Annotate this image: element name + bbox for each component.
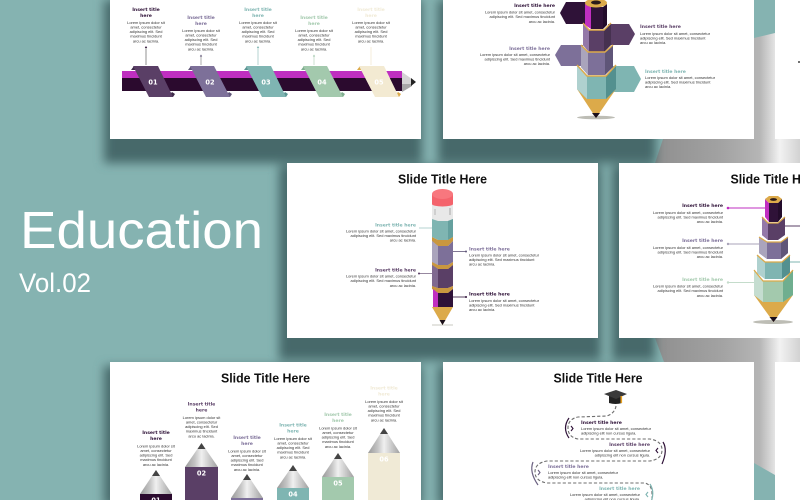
pencil 4: here [287,428,299,434]
text block green: Insert title here [682,277,723,283]
text block 3: adipiscing elit non cursus ligula. [548,474,603,480]
step 4 text: here [308,21,320,27]
text block dark: Insert title here [682,203,723,209]
text block purple: arcu ac lacinia. [390,283,416,288]
pencil 2: Lorem ipsum dolor sit [183,415,221,420]
text block 2: Lorem ipsum dolor sit amet, consectetur [640,31,711,36]
pencil 3 [228,435,267,500]
text block 1: Lorem ipsum dolor sit amet, consectetur [581,426,652,431]
pencil 6: adipiscing elit. Sed [368,408,400,413]
text block grey-purple [469,246,540,266]
step 3 text: Lorem ipsum dolor sit [239,20,278,25]
text block purple: adipiscing elit. Sed maximus tincidunt [351,278,417,283]
text block 1: arcu ac lacinia. [529,19,555,24]
step 1 text: amet, consectetur [130,24,162,30]
ribbon numbers: 01 [148,78,158,86]
pencil 2: arcu ac lacinia. [188,434,215,438]
text block 4: Insert title here [599,486,640,492]
step 2 text: Lorem ipsum dolor sit [182,28,221,33]
text block dark: Insert title here [469,292,510,298]
pencil 2 [183,402,221,500]
step 5 text: arcu ac lacinia. [358,38,384,44]
text block 2 [640,24,711,45]
text block 4: adipiscing elit. Sed maximus tincidunt [645,80,711,84]
pencil 6: 06 [379,456,389,464]
pencil 6: Lorem ipsum dolor sit [365,399,404,404]
step 3 text: adipiscing elit. Sed [242,29,274,34]
text block 1: adipiscing elit. Sed maximus tincidunt [490,14,556,19]
text block 3: Lorem ipsum dolor sit amet, consectetur [480,52,551,57]
pencil 3: here [241,441,253,447]
text block 4 [645,69,716,89]
arrow tabs [555,2,641,92]
pencil 5: 05 [333,480,343,488]
text block 3 [480,46,551,66]
text block dark: Lorem ipsum dolor sit amet, consectetur [653,210,724,215]
slide title: Slide Title Here [398,172,487,186]
pencil 5: here [332,418,344,424]
pencil 6: arcu ac lacinia. [371,418,397,422]
step 1 text: adipiscing elit. Sed [130,29,162,34]
text block 2: adipiscing elit non cursus ligula. [595,452,650,458]
text block 1: Lorem ipsum dolor sit amet, consectetur [485,10,556,14]
step 5 text: here [365,13,377,19]
text block 4: Insert title here [645,69,686,75]
pencil 3: adipiscing elit. Sed [231,458,263,462]
pencil 1: maximus tincidunt [140,457,173,462]
subtitle: Vol.02 [19,268,91,298]
ribbon numbers: 05 [374,78,384,86]
text block dark [653,203,724,224]
step 2 text: Insert title [187,15,215,21]
pencil 3: maximus tincidunt [231,462,264,467]
text block 4: Lorem ipsum dolor sit amet, consectetur [645,75,716,80]
step 5 text: maximus tincidunt [355,34,388,38]
pencil 1: Lorem ipsum dolor sit [137,444,176,448]
pencil 1: arcu ac lacinia. [143,462,169,467]
text block purple: Lorem ipsum dolor sit amet, consectetur [346,274,417,278]
text block grey-purple: Insert title here [682,238,723,244]
pencil 3: amet, consectetur [231,453,263,458]
step 1 text: arcu ac lacinia. [133,38,159,44]
step 5 text: amet, consectetur [355,24,387,30]
text block 2: arcu ac lacinia. [640,40,666,45]
step 4 text: maximus tincidunt [298,42,331,46]
pencil 5: amet, consectetur [322,430,354,435]
pencil 1: here [150,436,162,442]
text block 3: Lorem ipsum dolor sit amet, consectetur [548,470,619,475]
text block dark: arcu ac lacinia. [697,219,723,224]
pencil 5: Lorem ipsum dolor sit [319,426,358,430]
slide: tapered pencil [619,163,800,338]
step 5 text [352,7,391,44]
step 2 text [182,15,221,52]
text block 2: Insert title here [640,24,681,30]
step 4 text: amet, consectetur [298,32,330,38]
pencil 5: Insert title [324,412,352,418]
pencil 4: 04 [288,490,298,498]
step 1 text: maximus tincidunt [130,34,163,38]
step 4 text: Insert title [300,15,328,21]
pencil 5: maximus tincidunt [322,439,355,444]
slide shadows [104,0,656,500]
text block dark [469,292,540,312]
step 3 text: arcu ac lacinia. [245,38,271,44]
text block teal [346,222,417,242]
step 5 text: Insert title [357,7,385,13]
connectors [727,207,800,284]
text block 4: Lorem ipsum dolor sit amet, consectetur [570,492,641,497]
slide title: Slide Title Here [554,370,642,386]
pencil 1: adipiscing elit. Sed [140,452,172,458]
step 2 text: here [195,21,207,27]
step 1 text: here [140,13,152,19]
text block teal: arcu ac lacinia. [390,238,416,242]
text block 2 [580,442,651,458]
connectors [418,228,467,298]
pencil 6: maximus tincidunt [368,412,401,418]
text block 1 [485,3,556,24]
text block 1: Insert title here [514,3,555,9]
text block green: adipiscing elit. Sed maximus tincidunt [658,288,724,293]
text block grey-purple: adipiscing elit. Sed maximus tincidunt [469,257,535,262]
ribbon numbers: 04 [317,78,327,86]
pencil 2: here [196,408,207,414]
text block 4 [570,486,641,500]
step 4 text: adipiscing elit. Sed [298,37,330,42]
pencil [432,189,453,325]
text block purple: Insert title here [375,268,416,274]
pencil 3: arcu ac lacinia. [234,467,260,472]
icon: graduation cap [604,390,627,404]
step 1 text: Lorem ipsum dolor sit [127,20,166,25]
pencil 4: maximus tincidunt [277,450,310,454]
pencil 3: Insert title [233,435,261,441]
pencil 4: Insert title [279,422,307,428]
chevrons [538,426,658,497]
step 3 text [239,7,278,44]
text block grey-purple: adipiscing elit. Sed maximus tincidunt [658,250,724,254]
pencil body [122,71,416,92]
step 5 text: Lorem ipsum dolor sit [352,20,391,25]
text block dark: adipiscing elit. Sed maximus tincidunt [658,214,724,220]
step 2 text: arcu ac lacinia. [188,46,214,52]
text block 2: Insert title here [609,442,650,448]
step 3 text: here [252,13,264,19]
text block 1: Insert title here [581,420,622,426]
text block dark: adipiscing elit. Sed maximus tincidunt [469,302,535,308]
pencil 4: adipiscing elit. Sed [277,445,309,450]
slide edge: top right [775,0,800,139]
pencil 5 [319,412,358,500]
pencil 2: maximus tincidunt [186,428,218,434]
ribbon numbers [148,78,384,86]
step 1 text [127,7,166,44]
dashed path [532,406,665,500]
pencil 4: amet, consectetur [277,440,309,446]
text block dark: Lorem ipsum dolor sit amet, consectetur [469,298,540,303]
text block grey-purple [653,238,724,259]
text block 3: arcu ac lacinia. [524,61,550,66]
pencil 6: here [378,392,390,398]
ribbon numbers: 02 [205,78,215,86]
pencil 1: Insert title [142,430,170,436]
pencil 6: Insert title [370,386,398,392]
text block teal: adipiscing elit. Sed maximus tincidunt [351,233,417,238]
step 4 text [295,15,334,52]
pencil 2: 02 [197,470,206,478]
step 3 text: Insert title [244,7,272,13]
slide: timeline pencil [110,0,421,139]
text block grey-purple: arcu ac lacinia. [697,254,723,259]
main title: Education [20,202,263,260]
text block purple [346,268,417,288]
pencil 5: arcu ac lacinia. [325,444,351,449]
text block teal: Insert title here [375,222,416,228]
text block 1: adipiscing elit non cursus ligula. [581,430,636,436]
step 1 text: Insert title [132,7,160,13]
pencil 1: amet, consectetur [140,448,172,453]
pencil 4: Lorem ipsum dolor sit [274,436,313,441]
text block 3: Insert title here [509,46,550,52]
ribbons [131,66,401,97]
pencil 1 [137,430,176,500]
slide title: Slide Title Here [221,370,310,386]
step 3 text: amet, consectetur [242,24,274,30]
pencil 2: adipiscing elit. Sed [185,424,218,429]
step 3 text: maximus tincidunt [242,34,275,38]
pencil 2: amet, consectetur [186,420,218,424]
text block grey-purple: Lorem ipsum dolor sit amet, consectetur [653,245,724,250]
step 4 text: arcu ac lacinia. [301,46,327,52]
text block green: arcu ac lacinia. [697,293,723,298]
text block green: Lorem ipsum dolor sit amet, consectetur [653,284,724,288]
slide: eraser pencil [287,163,598,338]
text block 3 [548,464,619,480]
text block grey-purple: Insert title here [469,246,510,252]
step 2 text: maximus tincidunt [185,42,218,46]
text block 3: Insert title here [548,464,589,470]
pencil 5: adipiscing elit. Sed [322,434,354,440]
text block grey-purple: Lorem ipsum dolor sit amet, consectetur [469,252,540,258]
grey diagonal shape behind slides [655,28,800,484]
text block grey-purple: arcu ac lacinia. [469,262,495,266]
text block 4: arcu ac lacinia. [645,84,671,89]
slide edge: bottom right [775,362,800,500]
pencil 2: Insert title [188,402,215,408]
pencil [753,196,793,324]
slide: graduation path [443,362,754,500]
pencil [577,0,616,119]
pencil 4 [274,422,313,500]
slide: stacked pencil with arrows [443,0,754,139]
pencil 6 [365,386,404,500]
step 2 text: adipiscing elit. Sed [185,37,217,42]
connectors [145,46,371,65]
text block 3: adipiscing elit. Sed maximus tincidunt [485,56,551,62]
text block teal: Lorem ipsum dolor sit amet, consectetur [346,228,417,234]
pencil 3: Lorem ipsum dolor sit [228,448,267,454]
slide: pencil bar chart [110,362,421,500]
text block 2: adipiscing elit. Sed maximus tincidunt [640,36,706,40]
text block green [653,277,724,298]
step 5 text: adipiscing elit. Sed [355,29,387,34]
pencil 6: amet, consectetur [368,404,400,408]
pencil 4: arcu ac lacinia. [280,454,306,460]
text block dark: arcu ac lacinia. [469,307,495,312]
text block 2: Lorem ipsum dolor sit amet, consectetur [580,448,651,453]
ribbon numbers: 03 [261,78,271,86]
step 4 text: Lorem ipsum dolor sit [295,28,334,33]
step 2 text: amet, consectetur [185,32,217,38]
text block 1 [581,420,652,436]
